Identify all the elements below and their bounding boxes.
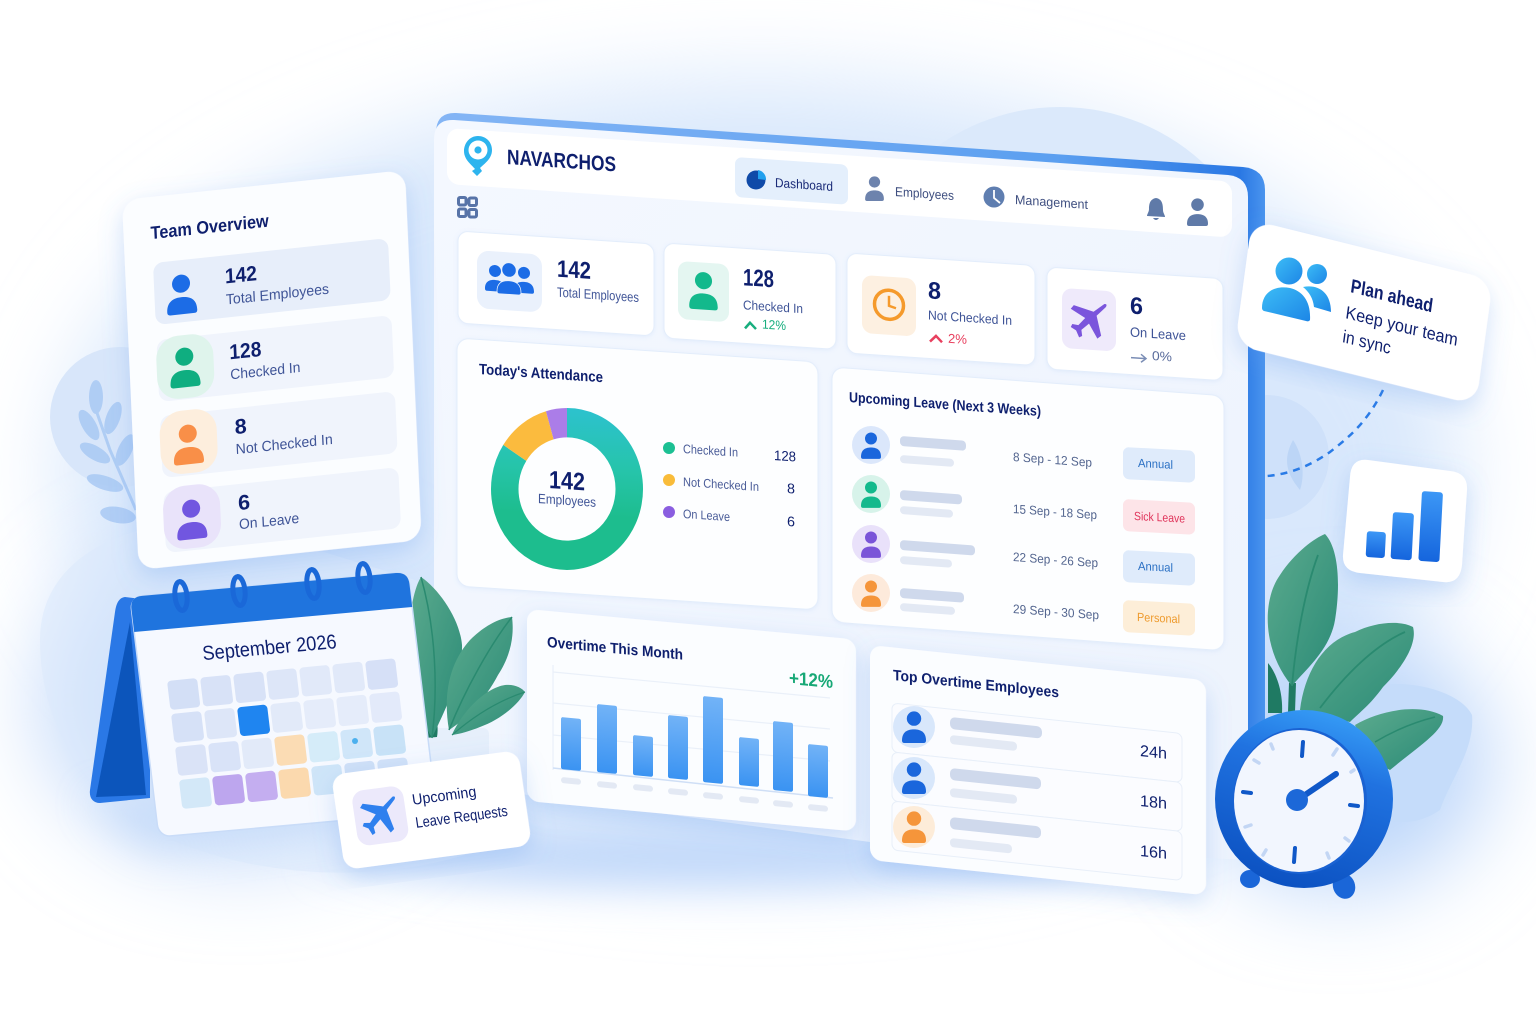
- calendar back stand: [90, 597, 150, 803]
- stat card: not checked in: [847, 253, 1035, 365]
- legend: [663, 442, 796, 530]
- tab: management: Management: [1015, 192, 1088, 212]
- donut chart: [505, 423, 629, 555]
- stat card: checked in: [664, 243, 836, 349]
- dashboard frame: [434, 113, 1265, 860]
- trend up 2%: 2%: [948, 331, 967, 347]
- clock inner rim: [1233, 728, 1367, 874]
- row 3: 16h: [1140, 842, 1167, 863]
- callout text: Plan ahead: [1349, 275, 1434, 317]
- trend up 2%: [930, 330, 967, 347]
- panel: upcoming leave: [832, 367, 1224, 651]
- row: on leave: 6: [238, 491, 251, 515]
- calendar day grid: [167, 658, 410, 809]
- tab: employees: [865, 176, 954, 203]
- trend up 12%: 12%: [762, 317, 786, 333]
- calendar header: [130, 572, 412, 632]
- decorative circle and leaves, left: [50, 347, 190, 526]
- row 1: Annual: [1138, 456, 1173, 472]
- trend flat 0%: 0%: [1152, 348, 1172, 364]
- row: not checked in: [159, 388, 398, 478]
- heading: Today's Attendance: [479, 361, 603, 386]
- decorative circle, right: [1205, 395, 1329, 519]
- icon: plane: [351, 785, 410, 847]
- card: upcoming leave requests: [331, 750, 532, 870]
- row 3: 22 Sep - 26 Sep: [1013, 550, 1098, 570]
- dashed connector: [1267, 390, 1383, 476]
- clock hand: [1305, 774, 1336, 795]
- stat card: checked in: 128: [743, 264, 774, 293]
- row: checked in: 128: [229, 338, 262, 364]
- donut centre label: 142: [549, 466, 585, 496]
- clock body: [1215, 710, 1393, 888]
- row 1: [893, 706, 1167, 763]
- callout text: [1341, 275, 1459, 358]
- clock hub: [1286, 789, 1308, 811]
- row 3: Annual: [1138, 559, 1173, 575]
- row 2: [852, 475, 1195, 535]
- label: Upcoming: [411, 784, 477, 809]
- trend flat 0%: [1131, 347, 1172, 364]
- month label: September 2026: [201, 631, 338, 665]
- minor ticks: [1245, 744, 1354, 858]
- legend: 128: [774, 447, 796, 464]
- tab: employees: Employees: [895, 184, 954, 203]
- heading: Upcoming Leave (Next 3 Weeks): [849, 390, 1041, 420]
- panel: top overtime employees: [870, 645, 1206, 895]
- donut centre label: [538, 466, 596, 510]
- stat card: total employees: 142: [557, 256, 591, 285]
- navbar: [447, 128, 1232, 238]
- label: [411, 780, 509, 832]
- tab: management: [984, 186, 1088, 212]
- stat card: on leave: On Leave: [1130, 325, 1186, 343]
- frame panel: [434, 120, 1248, 860]
- heading: Team Overview: [150, 211, 270, 243]
- row 2: 18h: [1140, 792, 1167, 813]
- trend up 12%: [745, 315, 786, 333]
- row 2: 15 Sep - 18 Sep: [1013, 502, 1097, 522]
- row: on leave: [162, 463, 401, 553]
- bell icon: [1147, 198, 1165, 220]
- navbar background: [447, 128, 1232, 238]
- callout text: in sync: [1341, 326, 1392, 358]
- stat card: on leave: 6: [1130, 293, 1143, 320]
- logo pin: [464, 136, 492, 176]
- row 4: [852, 574, 1195, 636]
- frame blue edge: [436, 113, 1265, 860]
- donut centre label: Employees: [538, 491, 596, 510]
- row 3: [852, 525, 1195, 586]
- legend: 6: [787, 513, 795, 530]
- row: total employees: [153, 238, 391, 325]
- icon: orange clock: [862, 275, 916, 337]
- row outlines: [892, 703, 1182, 880]
- user icon: [1187, 198, 1208, 226]
- row 1: [852, 426, 1195, 483]
- row: not checked in: 8: [234, 415, 248, 439]
- row 1: 24h: [1140, 742, 1167, 763]
- row 4: Personal: [1137, 610, 1180, 626]
- tab: dashboard: Dashboard: [775, 175, 833, 194]
- alarm clock: [1215, 710, 1393, 902]
- panel: team overview: [122, 170, 422, 570]
- clock face: [1234, 730, 1364, 872]
- panel: overtime this month: [527, 609, 856, 832]
- stat card: checked in: Checked In: [743, 297, 803, 316]
- card: chart icon: [1343, 460, 1467, 582]
- stat card: total employees: [458, 231, 654, 336]
- bar chart: [561, 696, 828, 798]
- legend: On Leave: [683, 507, 730, 524]
- row: not checked in: Not Checked In: [235, 432, 333, 458]
- icon: green person: [678, 261, 729, 322]
- calendar event dot: [352, 738, 358, 744]
- right plant: [1268, 534, 1443, 770]
- stat card: not checked in: 8: [928, 277, 941, 305]
- stat card: not checked in: Not Checked In: [928, 307, 1012, 328]
- row 1: 8 Sep - 12 Sep: [1013, 450, 1092, 470]
- brand name: NAVARCHOS: [507, 146, 616, 176]
- row 3: [893, 806, 1167, 863]
- rings: [174, 563, 371, 611]
- callout text: Keep your team: [1344, 302, 1459, 350]
- icon: two people: [1262, 258, 1331, 321]
- row 2: [893, 757, 1167, 813]
- legend: Not Checked In: [683, 475, 759, 494]
- row: total employees: Total Employees: [226, 282, 329, 308]
- row: checked in: [155, 313, 394, 402]
- blob behind right plant: [1360, 684, 1472, 822]
- heading: Top Overtime Employees: [893, 667, 1059, 701]
- icon: group: [477, 250, 542, 313]
- stat card: total employees: Total Employees: [557, 285, 639, 305]
- axis: [553, 665, 830, 770]
- row: on leave: On Leave: [239, 511, 299, 533]
- axis labels placeholders: [561, 777, 828, 812]
- left plant: [409, 577, 525, 762]
- decorative circle behind dashboard: [849, 107, 1271, 529]
- callout: plan ahead: [1235, 220, 1493, 405]
- icon: purple plane: [1062, 288, 1116, 352]
- pot: [425, 728, 489, 762]
- calendar ground shadow: [85, 790, 430, 850]
- row 4: 29 Sep - 30 Sep: [1013, 602, 1099, 622]
- stat card: on leave: [1047, 267, 1223, 381]
- clock feet: [1240, 870, 1359, 902]
- major ticks: [1243, 742, 1358, 862]
- delta: +12%: [789, 667, 833, 692]
- callout card: [1235, 220, 1493, 405]
- legend: 8: [787, 480, 795, 497]
- icon: grid: [458, 198, 476, 217]
- row: checked in: Checked In: [230, 360, 301, 383]
- row 2: Sick Leave: [1134, 509, 1185, 526]
- row: total employees: 142: [224, 262, 257, 288]
- label: Leave Requests: [414, 803, 509, 832]
- panel: today's attendance: [457, 338, 818, 610]
- baseline: [553, 768, 833, 798]
- tab: dashboard: [735, 157, 848, 205]
- legend: Checked In: [683, 442, 738, 460]
- calendar page: [130, 572, 437, 837]
- heading: Overtime This Month: [547, 634, 683, 664]
- calendar: [85, 563, 437, 850]
